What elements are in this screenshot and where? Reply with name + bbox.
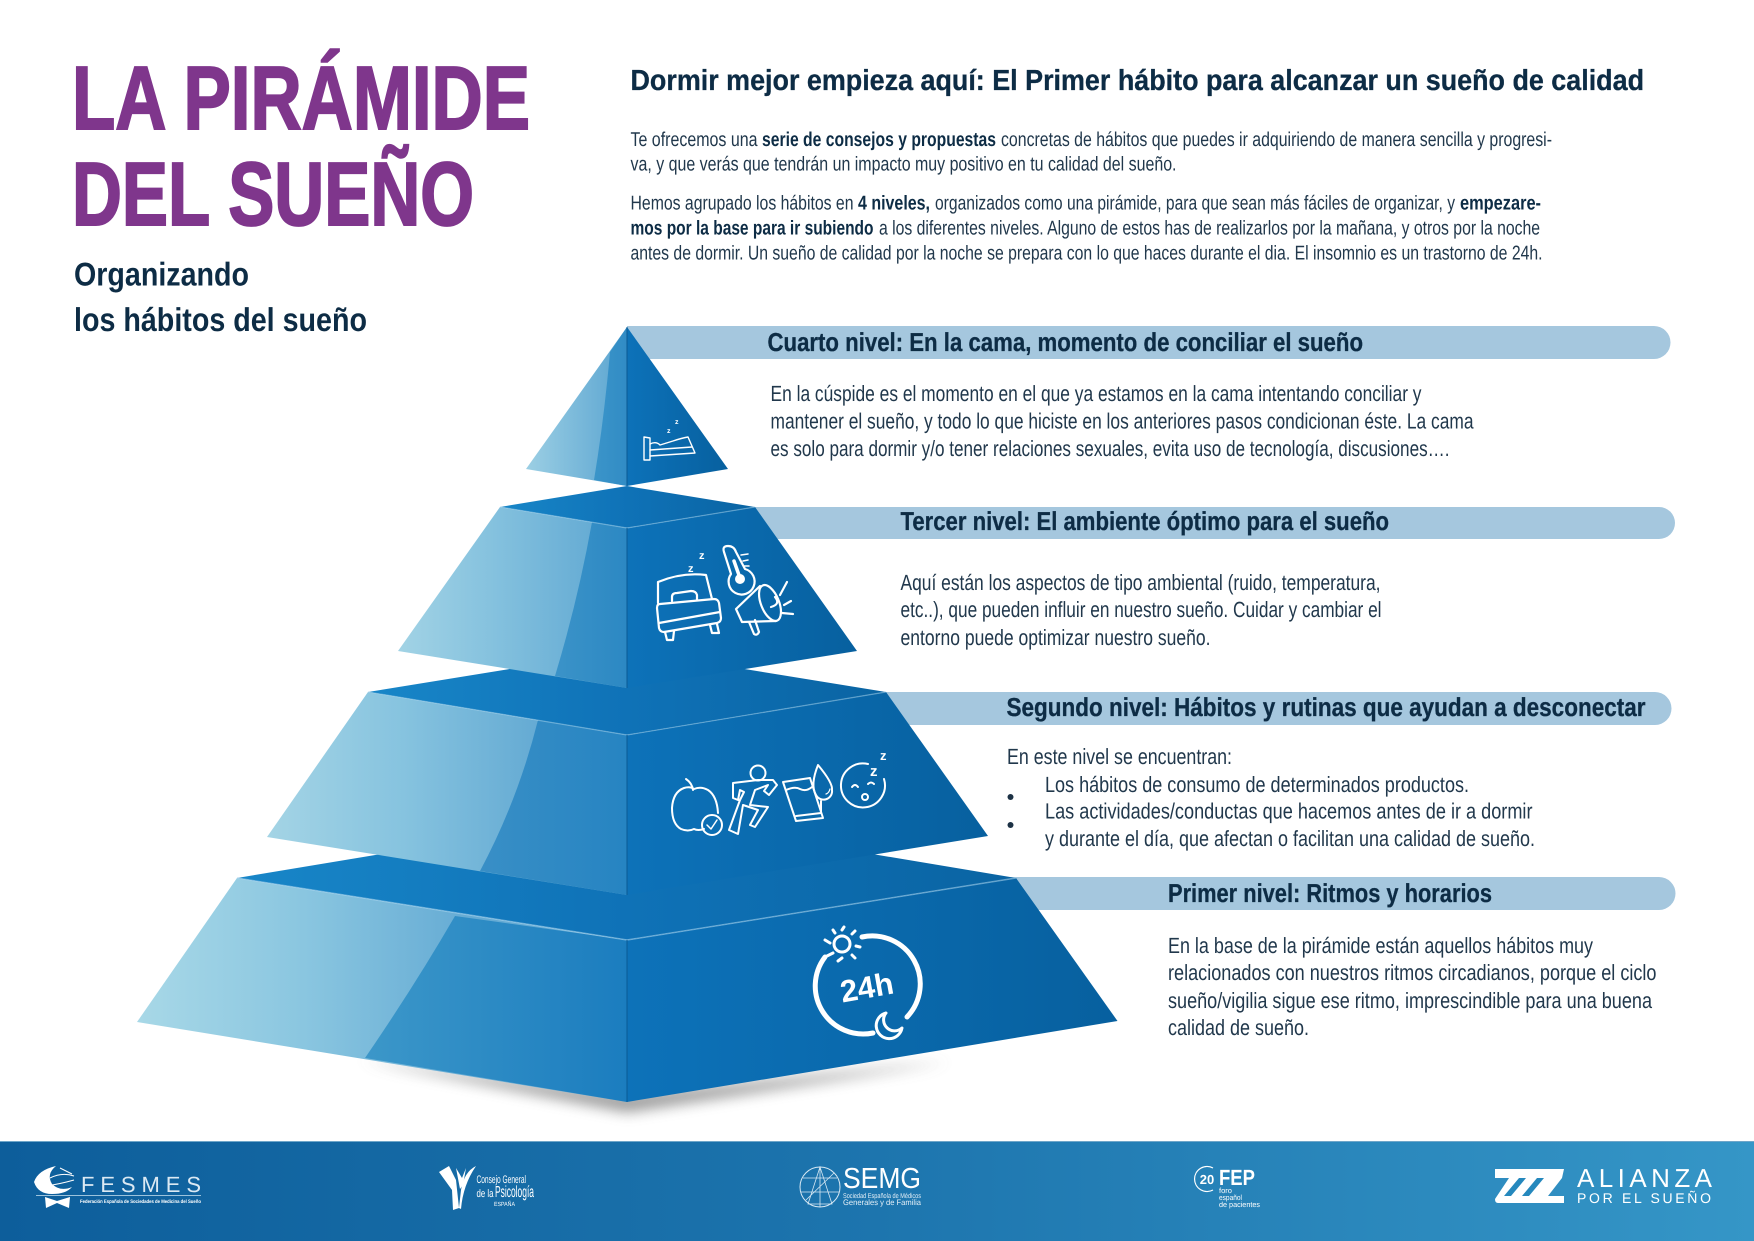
- level bar: cuarto nivel: [627, 326, 1670, 359]
- logo: Alianza por el sueño: [1495, 1163, 1713, 1206]
- level 4: apex: [526, 327, 728, 486]
- subtitle: los hábitos del sueño: [74, 301, 367, 338]
- level 3: [398, 486, 857, 688]
- intro text block: antes de dormir. Un sueño de calidad por la noche se prepara con lo que haces durante el dia. El insomnio es un trastorno de 24h.: [630, 242, 1542, 264]
- icon: bed, fourth level: [644, 419, 695, 460]
- text: cuarto nivel: En la cúspide es el momento en el que ya estamos en la cama intentando conciliar y: [770, 381, 1422, 406]
- logo: SEMG: SEMG: [843, 1163, 921, 1195]
- heading: Dormir mejor empieza aquí: El Primer hábito para alcanzar un sueño de calidad: [630, 65, 1644, 97]
- text: segundo nivel: En este nivel se encuentran:: [1007, 744, 1232, 769]
- logo: FEP: FEP: [1219, 1165, 1255, 1190]
- text: segundo nivel: y durante el día, que afectan o facilitan una calidad de sueño.: [1045, 826, 1535, 851]
- logo: FESMES: FESMES: [81, 1172, 201, 1197]
- intro text block: 4 niveles,: [858, 192, 930, 214]
- icon: bed, fourth level: z: [675, 419, 679, 426]
- text: primer nivel: En la base de la pirámide están aquellos hábitos muy: [1168, 933, 1593, 958]
- heading: segundo nivel: Segundo nivel: Hábitos y rutinas que ayudan a desconectar: [1006, 692, 1646, 722]
- icon: apple with check: [672, 779, 722, 835]
- logo: FEP: español: [1219, 1193, 1242, 1202]
- icon: sleeping face: z: [870, 763, 878, 780]
- level bar: tercer nivel: [700, 507, 1675, 539]
- text: cuarto nivel: [770, 381, 1474, 461]
- title: DEL SUEÑO: [72, 144, 474, 245]
- text: tercer nivel: etc..), que pueden influir en nuestro sueño. Cuidar y cambiar el: [900, 597, 1382, 622]
- heading: cuarto nivel: Cuarto nivel: En la cama, momento de conciliar el sueño: [768, 327, 1363, 357]
- icon: sleeping face: z: [880, 748, 887, 763]
- icon: glass and water drop: [783, 765, 832, 821]
- subtitle: Organizando: [74, 256, 249, 292]
- icon: bed, third level: [657, 550, 721, 640]
- logo: FEP: [1195, 1165, 1260, 1209]
- logo: Consejo General de la Psicología: de la: [476, 1188, 494, 1200]
- icon: bed, fourth level: z: [667, 428, 671, 435]
- text: primer nivel: calidad de sueño.: [1168, 1015, 1309, 1040]
- intro text block: a los diferentes niveles. Alguno de estos has de realizarlos por la mañana, y otros por la noche: [879, 218, 1540, 240]
- footer band: [0, 1141, 1754, 1241]
- intro text block: Te ofrecemos una: [630, 129, 758, 151]
- text: primer nivel: sueño/vigilia sigue ese ritmo, imprescindible para una buena: [1168, 988, 1653, 1013]
- logo: SEMG: Generales y de Familia: [843, 1198, 922, 1207]
- subtitle: [74, 256, 367, 338]
- text: primer nivel: relacionados con nuestros ritmos circadianos, porque el ciclo: [1168, 960, 1656, 985]
- icon: sleeping face: [841, 748, 887, 807]
- logo: Consejo General de la Psicología: Consejo General: [476, 1174, 526, 1186]
- heading: tercer nivel: Tercer nivel: El ambiente óptimo para el sueño: [900, 506, 1389, 536]
- icon: 24h clock with sun and moon: [815, 927, 920, 1039]
- heading: primer nivel: Primer nivel: Ritmos y horarios: [1168, 878, 1492, 908]
- logo: Alianza por el sueño: POR EL SUEÑO: [1577, 1190, 1711, 1206]
- intro text block: mos por la base para ir subiendo: [630, 218, 874, 240]
- text: tercer nivel: entorno puede optimizar nuestro sueño.: [900, 625, 1210, 650]
- text: segundo nivel: Los hábitos de consumo de determinados productos.: [1045, 772, 1469, 797]
- intro text block: organizados como una pirámide, para que sean más fáciles de organizar, y: [935, 192, 1455, 214]
- text: segundo nivel: Las actividades/conductas que hacemos antes de ir a dormir: [1045, 798, 1532, 824]
- icon: runner: [729, 766, 777, 834]
- intro text block: serie de consejos y propuestas: [762, 129, 996, 151]
- level 2: [267, 650, 988, 895]
- title: [72, 49, 530, 245]
- text: cuarto nivel: es solo para dormir y/o tener relaciones sexuales, evita uso de tecnología, discusiones….: [770, 436, 1450, 461]
- logo: Alianza por el sueño: ALIANZA: [1577, 1163, 1713, 1193]
- icon: 24h clock with sun and moon: 24h: [838, 966, 896, 1009]
- intro text block: Hemos agrupado los hábitos en: [630, 192, 854, 214]
- icon: megaphone: [736, 582, 793, 635]
- icon: bed, third level: z: [699, 550, 705, 562]
- logo: FEP: de pacientes: [1219, 1200, 1260, 1209]
- pyramid shadow: [360, 1060, 950, 1112]
- logo: Consejo General de la Psicología: ESPAÑA: [494, 1200, 515, 1208]
- logo: FESMES: Federación Española de Sociedades de Medicina del Sueño: [80, 1199, 201, 1205]
- level bar: segundo nivel: [800, 692, 1672, 725]
- logo: SEMG: Sociedad Española de Médicos: [843, 1192, 921, 1200]
- text: cuarto nivel: mantener el sueño, y todo lo que hiciste en los anteriores pasos condicionan éste. La cama: [770, 408, 1474, 434]
- logo: Consejo General de la Psicología: Psicología: [495, 1184, 534, 1201]
- intro text block: [630, 129, 1552, 264]
- intro text block: va, y que verás que tendrán un impacto muy positivo en tu calidad del sueño.: [630, 154, 1176, 176]
- level 1: base: [137, 813, 1118, 1102]
- text: tercer nivel: [900, 570, 1382, 650]
- logo: FESMES: [34, 1166, 201, 1208]
- text: primer nivel: [1168, 933, 1656, 1040]
- pyramid: [137, 327, 1118, 1102]
- logo: FEP: foro: [1219, 1186, 1232, 1195]
- intro text block: empezare-: [1460, 192, 1541, 214]
- intro text block: concretas de hábitos que puedes ir adquiriendo de manera sencilla y progresi-: [1001, 129, 1552, 151]
- text: tercer nivel: Aquí están los aspectos de tipo ambiental (ruido, temperatura,: [900, 570, 1380, 595]
- level bar: primer nivel: [950, 877, 1676, 910]
- logo: FEP: 20: [1200, 1172, 1214, 1187]
- logo: Consejo General de la Psicología: [439, 1166, 534, 1210]
- title: LA PIRÁMIDE: [72, 49, 530, 149]
- logo: SEMG: [800, 1163, 922, 1207]
- icon: thermometer: [724, 546, 755, 595]
- icon: bed, third level: z: [688, 563, 694, 575]
- text: segundo nivel: [1007, 744, 1535, 851]
